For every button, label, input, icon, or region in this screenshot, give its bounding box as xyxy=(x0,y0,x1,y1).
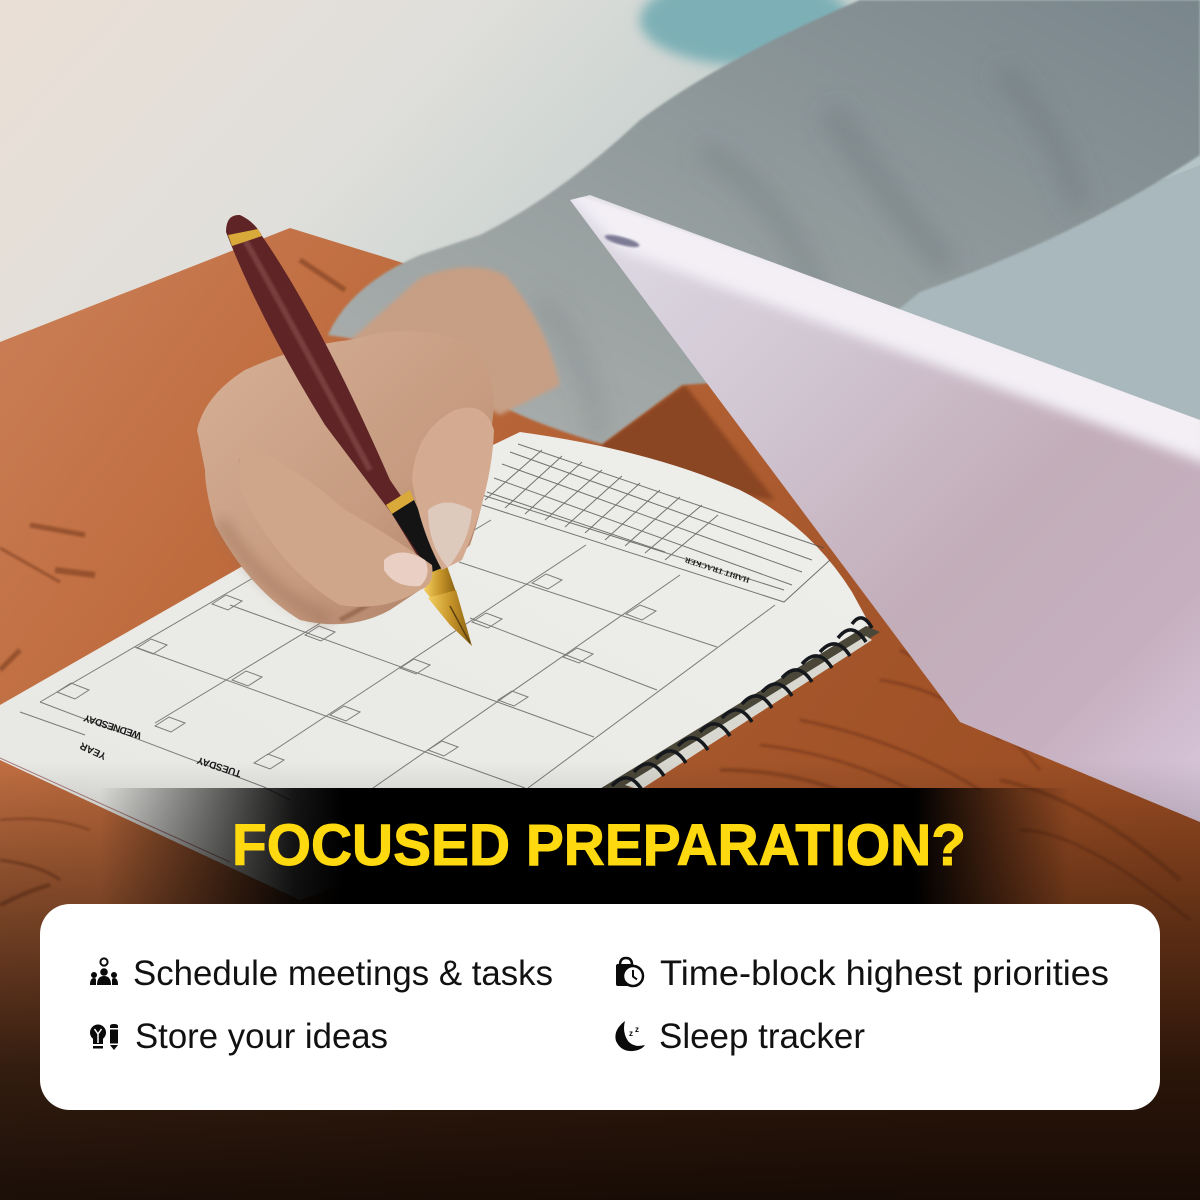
headline band xyxy=(100,788,1070,904)
planner grid lines xyxy=(20,520,775,800)
text: store ideas: Store your ideas xyxy=(135,1017,388,1056)
planner labels: WEDNESDAY xyxy=(82,712,143,741)
photo background: wall xyxy=(0,0,1200,460)
panel: feature list xyxy=(40,904,1160,1110)
photo: planner notebook xyxy=(0,432,880,900)
icon: moon and z's: z xyxy=(629,1029,633,1038)
planner labels: HABIT TRACKER xyxy=(683,555,751,585)
spiral binding xyxy=(598,626,880,792)
icon: moon and z's: z xyxy=(635,1025,639,1034)
icon: meeting people xyxy=(90,958,118,985)
photo: fountain pen xyxy=(226,215,472,646)
icon: moon and z's xyxy=(615,1021,645,1051)
photo: tablet in foreground xyxy=(560,185,1200,830)
text: time-block priorities: Time-block highest priorities xyxy=(660,954,1109,993)
planner labels: TUESDAY xyxy=(195,754,243,779)
text: sleep tracker: Sleep tracker xyxy=(659,1017,865,1056)
planner labels: YEAR xyxy=(78,739,108,761)
bottom dark shade xyxy=(0,760,1200,1200)
text: schedule meetings: Schedule meetings & tasks xyxy=(133,954,553,993)
habit tracker grid xyxy=(482,444,830,602)
title: FOCUSED PREPARATION? xyxy=(232,813,966,878)
photo: writing hand xyxy=(197,267,560,624)
planner labels xyxy=(78,555,751,779)
photo: grey sleeve xyxy=(328,0,1200,444)
icon: bulb and pencil xyxy=(90,1024,118,1050)
notebook page xyxy=(0,432,870,900)
icon: bag clock xyxy=(616,958,643,986)
photo: fingertips over the pen xyxy=(240,408,494,607)
